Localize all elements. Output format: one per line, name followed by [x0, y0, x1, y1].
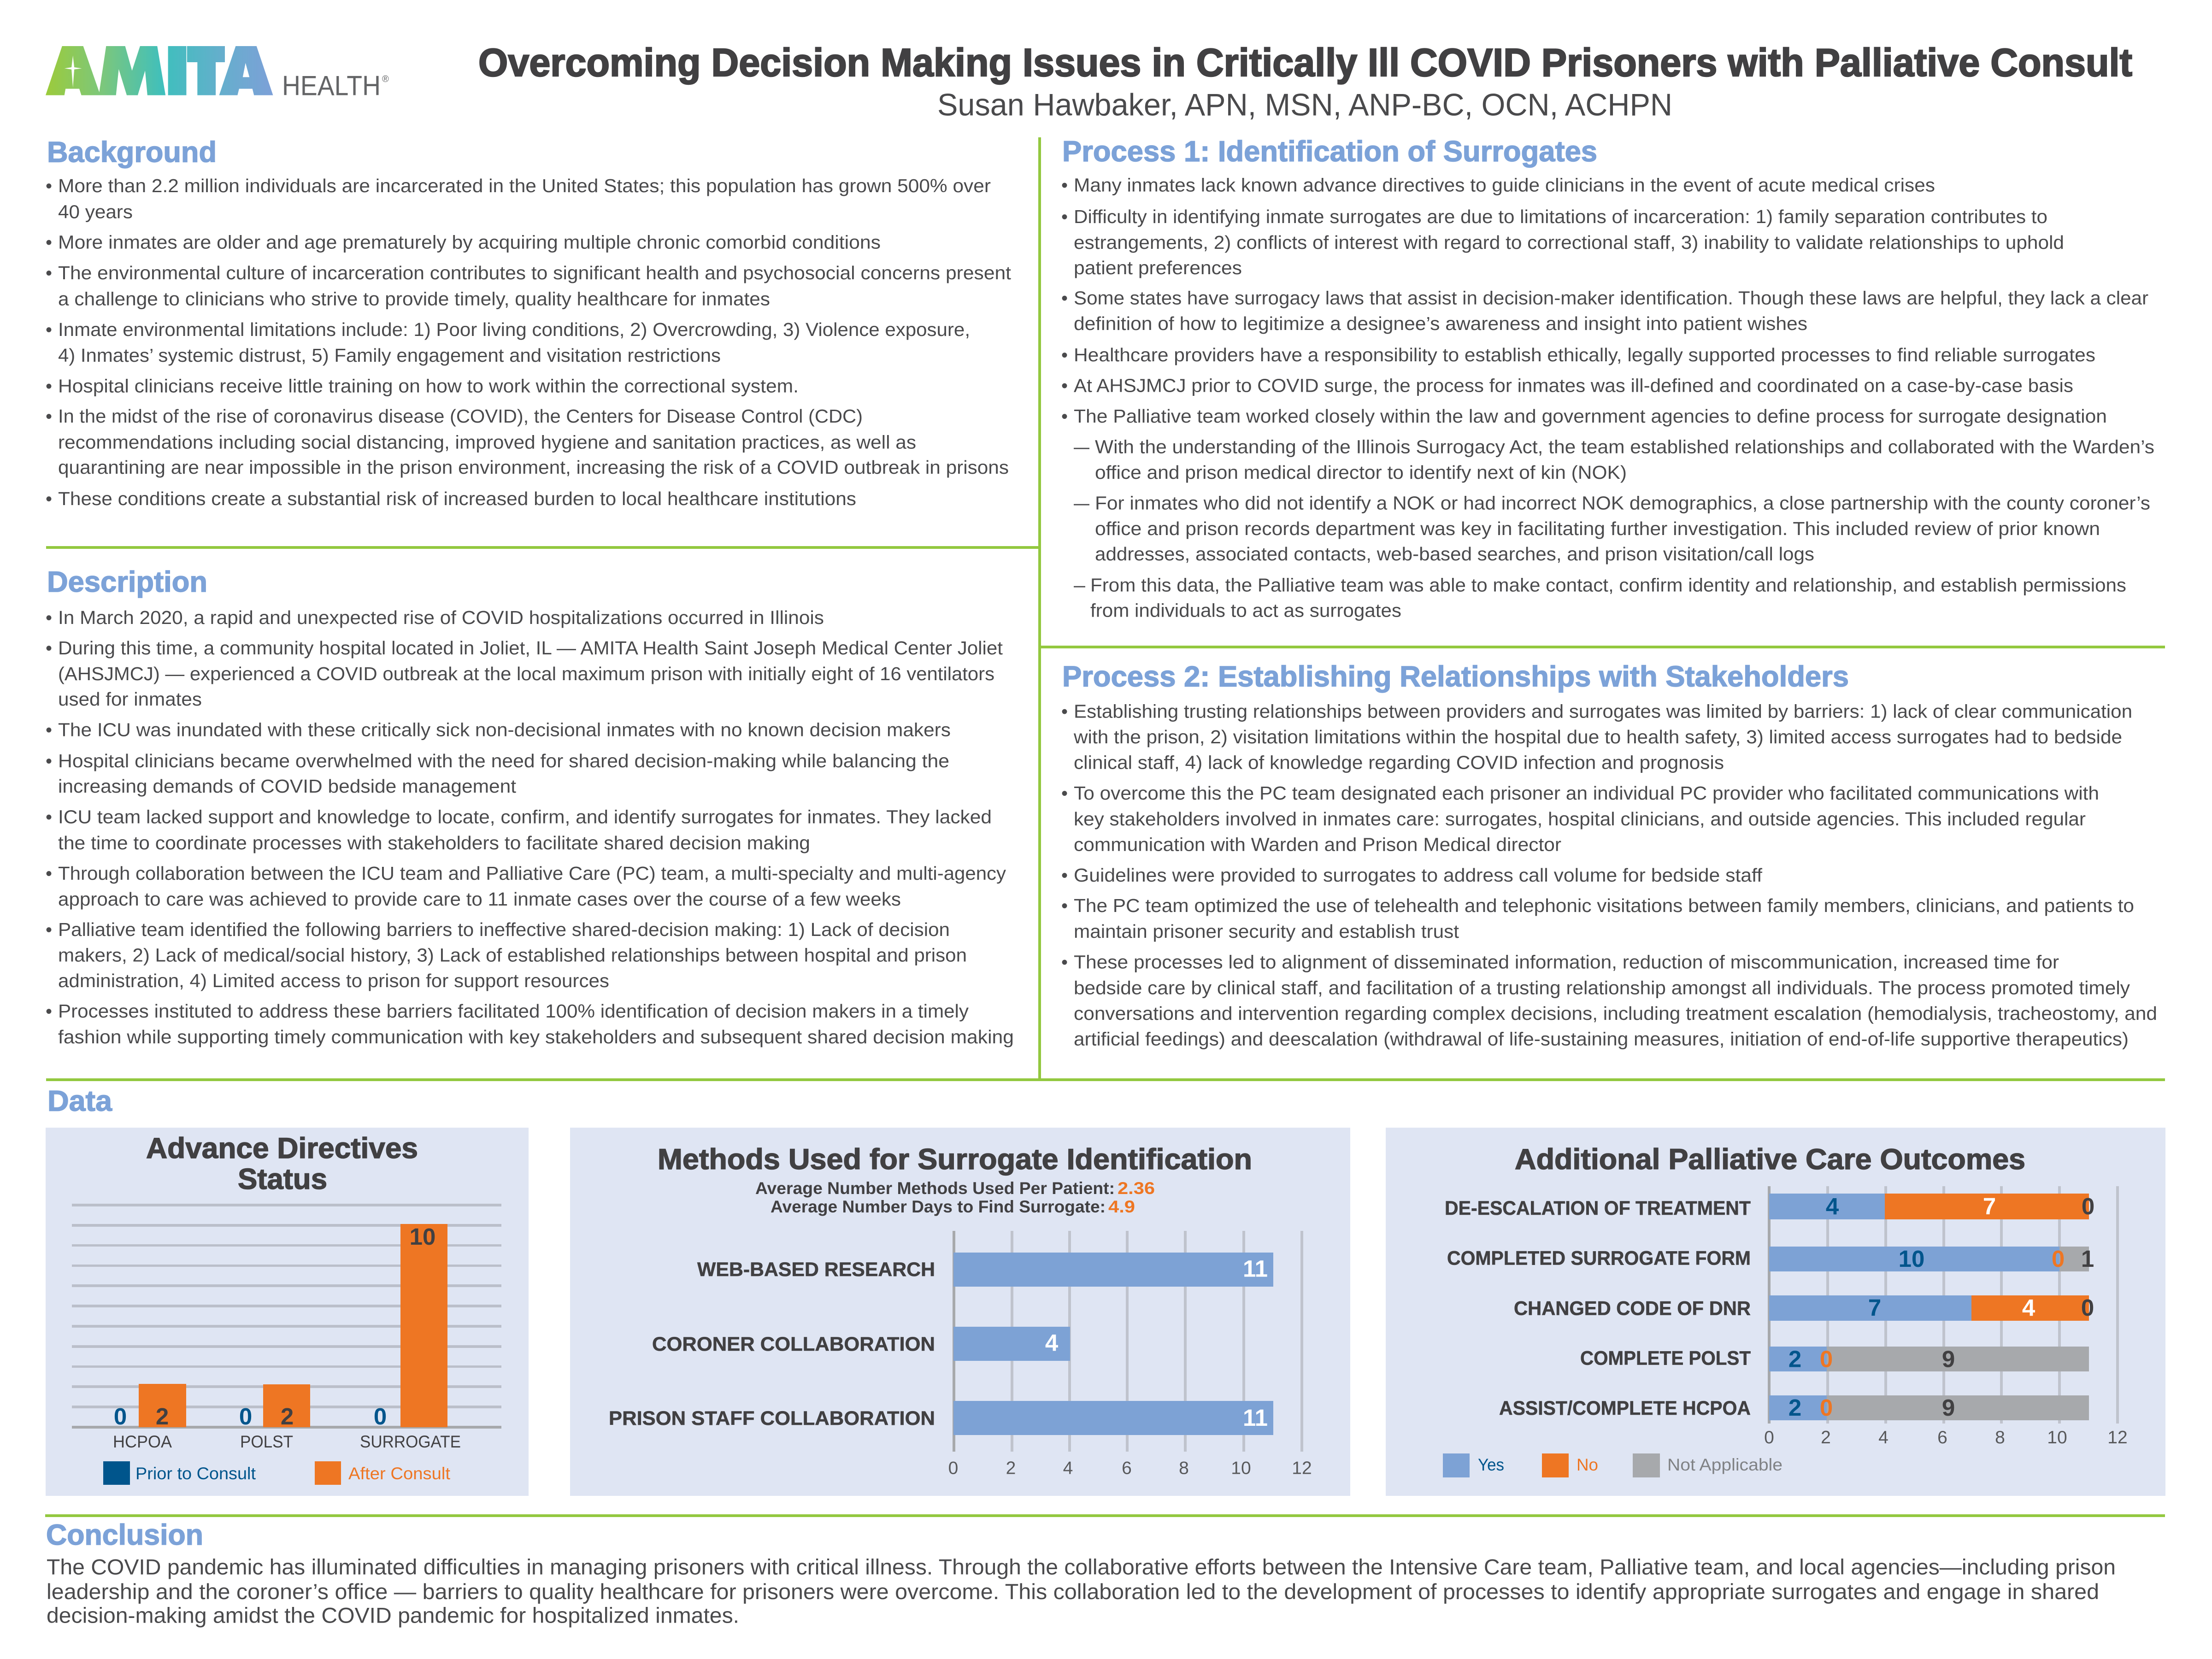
axis ticks: 10: [2047, 1428, 2067, 1447]
legend: Prior to Consult: [135, 1464, 256, 1483]
axis ticks: 2: [1006, 1458, 1016, 1478]
axis ticks: 12: [2107, 1428, 2128, 1447]
text block: Background bullets: •: [46, 176, 52, 196]
text block: Description bullets: Hospital clinicians became overwhelmed with the need for shared decision-making while balancing the: [58, 750, 949, 771]
text block: Background bullets: 4) Inmates’ systemic distrust, 5) Family engagement and visitation restrictions: [58, 345, 721, 366]
bar labels: ASSIST/COMPLETE HCPOA: [1499, 1397, 1751, 1419]
logo: AMITA Health: [46, 46, 389, 101]
legend: Not Applicable: [1667, 1455, 1783, 1474]
text block: Process 2 bullets: The PC team optimized the use of telehealth and telephonic visitations between family members, clinicians, and patients to: [1074, 895, 2134, 916]
author subtitle: Susan Hawbaker, APN, MSN, ANP-BC, OCN, ACHPN: [937, 88, 1672, 123]
text block: Process 1 bullets: Difficulty in identifying inmate surrogates are due to limitations of incarceration: 1) family separation contributes to: [1074, 206, 2047, 227]
bar values: [1045, 1255, 1268, 1431]
axis ticks: 8: [1995, 1428, 2005, 1447]
text block: Process 2 bullets: clinical staff, 4) lack of knowledge regarding COVID infection and prognosis: [1074, 752, 1724, 773]
heading: Data: Data: [47, 1085, 112, 1117]
bar labels: COMPLETE POLST: [1580, 1347, 1751, 1370]
text block: Process 1 bullets: from individuals to act as surrogates: [1090, 600, 1401, 621]
text block: Process 1 bullets: •: [1061, 345, 1068, 365]
bar values: 0: [2082, 1193, 2094, 1219]
bar values: 11: [1243, 1405, 1268, 1431]
bar values: 4: [1045, 1330, 1059, 1356]
data labels: 0: [239, 1403, 252, 1430]
text block: Process 1 bullets: Some states have surrogacy laws that assist in decision-maker identification. Though these laws are helpful, they lack a clear: [1074, 288, 2148, 309]
heading: Process 1: Process 1: Identification of Surrogates: [1062, 135, 1597, 168]
legend: After Consult: [348, 1464, 451, 1483]
category labels: POLST: [240, 1432, 293, 1451]
text block: Process 2 bullets: •: [1061, 952, 1068, 972]
text block: Description bullets: •: [46, 864, 52, 884]
text block: Process 1 bullets: •: [1061, 406, 1068, 427]
text block: Process 1 bullets: •: [1061, 207, 1068, 227]
bar values: 7: [1983, 1193, 1996, 1219]
heading: Description: Description: [47, 566, 207, 598]
grid lines: [953, 1231, 1303, 1452]
text block: Conclusion paragraph: leadership and the coroner’s office — barriers to quality healthcare for prisoners were overcome. This collaboration led to the development of processes to identify appropriate surrogates and engage in shared: [47, 1579, 2099, 1604]
text block: Background bullets: quarantining are near impossible in the prison environment, increasing the risk of a COVID outbreak in prisons: [58, 457, 1009, 478]
text block: Description bullets: •: [46, 1001, 52, 1022]
grid lines: [1768, 1186, 2119, 1424]
bars: [953, 1253, 1273, 1435]
text block: Process 1 bullets: •: [1061, 175, 1068, 195]
text block: Process 1 bullets: –: [1074, 574, 1085, 595]
bar labels: CORONER COLLABORATION: [652, 1333, 935, 1355]
text block: Background bullets: Hospital clinicians receive little training on how to work within the correctional system.: [58, 375, 799, 396]
panel: Additional Palliative Care Outcomes chart: [1386, 1128, 2165, 1496]
text block: Process 2 bullets: Establishing trusting relationships between providers and surrogates was limited by barriers: 1) lack of clear communication: [1074, 700, 2132, 722]
panel: Methods Used for Surrogate Identification chart: [570, 1128, 1350, 1496]
text block: Background bullets: More than 2.2 million individuals are incarcerated in the United States; this population has grown 500% over: [58, 175, 991, 196]
text block: Process 2 bullets: bedside care by clinical staff, and facilitation of a trusting relationship amongst all individuals. The process promoted timely: [1074, 977, 2130, 998]
bar values: 10: [1899, 1246, 1924, 1272]
text block: Process 2 bullets: •: [1061, 783, 1068, 804]
bar labels: [609, 1259, 935, 1430]
text block: Description bullets: •: [46, 720, 52, 740]
axis ticks: 6: [1122, 1458, 1132, 1478]
axis ticks: 12: [1292, 1458, 1312, 1478]
axis ticks: 8: [1179, 1458, 1189, 1478]
chart title: [146, 1132, 418, 1195]
bar labels: COMPLETED SURROGATE FORM: [1447, 1247, 1751, 1269]
text block: Description bullets: •: [46, 751, 52, 771]
text block: Description bullets: Through collaboration between the ICU team and Palliative Care (PC) team, a multi-specialty and multi-agency: [58, 863, 1006, 884]
text block: Background bullets: In the midst of the rise of coronavirus disease (COVID), the Centers for Disease Control (CDC): [58, 406, 863, 427]
text block: Background bullets: •: [46, 232, 52, 253]
legend: No: [1577, 1455, 1598, 1474]
bar labels: CHANGED CODE OF DNR: [1514, 1298, 1751, 1320]
text block: Background bullets: More inmates are older and age prematurely by acquiring multiple chronic comorbid conditions: [58, 231, 881, 253]
text block: Conclusion paragraph: [47, 1555, 2116, 1628]
bar labels: WEB-BASED RESEARCH: [697, 1259, 935, 1281]
bar values: 0: [2081, 1294, 2094, 1321]
bar values: 7: [1868, 1294, 1881, 1321]
text block: Process 2 bullets: communication with Warden and Prison Medical director: [1074, 834, 1561, 855]
bar values: 4: [2022, 1294, 2036, 1321]
text block: Process 2 bullets: •: [1061, 701, 1068, 722]
bar values: [1788, 1193, 2094, 1421]
text block: Process 2 bullets: These processes led to alignment of disseminated information, reduction of miscommunication, increased time for: [1074, 951, 2059, 972]
heading: Background: Background: [47, 136, 217, 169]
summary statistics: [755, 1179, 1155, 1216]
data labels: 0: [374, 1403, 387, 1430]
axis ticks: 0: [948, 1458, 958, 1478]
text block: Background bullets: These conditions create a substantial risk of increased burden to local healthcare institutions: [58, 488, 856, 509]
text block: Process 1 bullets: With the understanding of the Illinois Surrogacy Act, the team established relationships and collaborated with the Warden’s: [1095, 436, 2154, 457]
legend: Yes: [1478, 1455, 1504, 1474]
text block: Background bullets: recommendations including social distancing, improved hygiene and sanitation practices, as well as: [58, 431, 916, 453]
text block: Description bullets: administration, 4) Limited access to prison for support resources: [58, 970, 609, 991]
bar values: 0: [1820, 1394, 1833, 1421]
panel: Description: [46, 566, 1014, 1047]
text block: Description bullets: •: [46, 638, 52, 659]
axis ticks: 4: [1878, 1428, 1888, 1447]
text block: Process 1 bullets: •: [1061, 376, 1068, 396]
bar labels: DE-ESCALATION OF TREATMENT: [1445, 1197, 1751, 1219]
text block: Conclusion paragraph: The COVID pandemic has illuminated difficulties in managing prisoners with critical illness. Through the collaborative efforts between the Intensive Care team, Palliative team, and local agencies—including prison: [47, 1555, 2116, 1579]
text block: Description bullets: During this time, a community hospital located in Joliet, IL — AMITA Health Saint Joseph Medical Center Joliet: [58, 637, 1003, 659]
text block: Process 2 bullets: [1061, 700, 2157, 1050]
title: Overcoming Decision Making Issues in Critically Ill COVID Prisoners with Palliative Consult: [478, 41, 2132, 85]
text block: Process 1 bullets: definition of how to legitimize a designee’s awareness and insight into patient wishes: [1074, 313, 1807, 334]
logo wordmark: HEALTH: HEALTH: [282, 70, 381, 101]
text block: Description bullets: used for inmates: [58, 688, 202, 710]
panel: Process 1: [1061, 135, 2154, 621]
text block: Background bullets: Inmate environmental limitations include: 1) Poor living conditions, 2) Overcrowding, 3) Violence exposure,: [58, 319, 970, 340]
text block: Background bullets: a challenge to clinicians who strive to provide timely, quality healthcare for inmates: [58, 288, 770, 310]
text block: Process 2 bullets: artificial feedings) and deescalation (withdrawal of life-sustaining measures, initiation of end-of-life supportive therapeutics): [1074, 1029, 2129, 1050]
logo mark: AMITA gradient letters: [46, 46, 273, 95]
text block: Process 2 bullets: To overcome this the PC team designated each prisoner an individual PC provider who facilitated communications with: [1074, 782, 2099, 804]
text block: Description bullets: •: [46, 920, 52, 940]
text block: Process 2 bullets: •: [1061, 896, 1068, 916]
bar values: 11: [1243, 1255, 1268, 1282]
text block: Process 2 bullets: with the prison, 2) visitation limitations within the hospital due to health safety, 3) limited access surrogates had to bedside: [1073, 726, 2122, 747]
text block: Description bullets: Processes instituted to address these barriers facilitated 100% identification of decision makers in a timely: [58, 1000, 969, 1022]
text block: Description bullets: •: [46, 807, 52, 828]
axis ticks: [948, 1458, 1312, 1478]
heading: Conclusion: Conclusion: [46, 1519, 203, 1551]
data labels: 10: [410, 1224, 435, 1250]
text block: Process 1 bullets: addresses, associated contacts, web-based searches, and prison visitation/call logs: [1095, 543, 1814, 565]
bar values: 1: [2081, 1246, 2094, 1272]
axis ticks: 6: [1937, 1428, 1947, 1447]
bar values: 4: [1826, 1193, 1839, 1219]
bar labels: [1445, 1197, 1751, 1419]
text block: Background bullets: [46, 175, 1012, 509]
text block: Description bullets: In March 2020, a rapid and unexpected rise of COVID hospitalizations occurred in Illinois: [58, 607, 824, 628]
text block: Description bullets: the time to coordinate processes with stakeholders to facilitate shared decision making: [58, 832, 810, 853]
text block: Description bullets: makers, 2) Lack of medical/social history, 3) Lack of established relationships between hospital and prison: [58, 945, 967, 966]
divider: column and section rules: [45, 137, 2165, 1517]
summary statistics: Average Number Methods Used Per Patient:: [755, 1179, 1115, 1198]
text block: Description bullets: fashion while supporting timely communication with key stakeholders and subsequent shared decision making: [58, 1026, 1014, 1047]
legend: [1443, 1453, 1783, 1477]
text block: Process 1 bullets: —: [1074, 436, 1089, 457]
text block: Process 1 bullets: Healthcare providers have a responsibility to establish ethically, legally supported processes to find reliable surrogates: [1074, 344, 2095, 365]
data labels: [114, 1224, 435, 1430]
text block: Description bullets: increasing demands of COVID bedside management: [58, 776, 517, 797]
axis ticks: 10: [1231, 1458, 1251, 1478]
text block: Description bullets: [46, 607, 1014, 1047]
text block: Process 2 bullets: key stakeholders involved in inmates care: surrogates, hospital clinicians, and outside agencies. This included regular: [1074, 808, 2086, 830]
category labels: HCPOA: [113, 1432, 172, 1451]
axis ticks: [1764, 1428, 2128, 1447]
text block: Process 1 bullets: At AHSJMCJ prior to COVID surge, the process for inmates was ill-defined and coordinated on a case-by-case basis: [1074, 375, 2073, 396]
panel: Advance Directives Status chart: [46, 1128, 529, 1496]
text block: Process 1 bullets: [1061, 174, 2154, 621]
text block: Background bullets: •: [46, 489, 52, 509]
panel: Background: [46, 136, 1012, 509]
text block: Description bullets: approach to care was achieved to provide care to 11 inmate cases over the course of a few weeks: [58, 888, 901, 910]
bar values: 9: [1942, 1394, 1955, 1421]
axis ticks: 2: [1821, 1428, 1831, 1447]
text block: Background bullets: •: [46, 376, 52, 396]
text block: Background bullets: 40 years: [58, 201, 133, 222]
bar labels: PRISON STAFF COLLABORATION: [609, 1407, 935, 1430]
text block: Process 2 bullets: Guidelines were provided to surrogates to address call volume for bedside staff: [1074, 865, 1763, 886]
logo registered mark: ®: [382, 74, 389, 84]
bar values: 0: [2052, 1246, 2065, 1272]
legend: [103, 1461, 451, 1485]
category labels: SURROGATE: [360, 1432, 461, 1451]
text block: Background bullets: •: [46, 263, 52, 283]
text block: Description bullets: •: [46, 608, 52, 628]
text block: Process 1 bullets: —: [1074, 492, 1089, 513]
chart title: Status: [238, 1163, 327, 1195]
summary statistics: 4.9: [1108, 1197, 1135, 1216]
chart title: Methods Used for Surrogate Identification: [658, 1143, 1252, 1176]
data labels: 2: [281, 1403, 294, 1430]
text block: Process 1 bullets: patient preferences: [1074, 257, 1242, 278]
grid lines: [72, 1204, 501, 1429]
text block: Process 1 bullets: For inmates who did not identify a NOK or had incorrect NOK demographics, a close partnership with the county coroner’s: [1095, 492, 2150, 513]
axis ticks: 0: [1764, 1428, 1774, 1447]
axis ticks: 4: [1063, 1458, 1073, 1478]
text block: Process 1 bullets: estrangements, 2) conflicts of interest with regard to correctional staff, 3) inability to validate relationships to uphold: [1074, 232, 2064, 253]
category labels: [113, 1432, 461, 1451]
bars: After Consult: [139, 1224, 447, 1427]
text block: Background bullets: •: [46, 406, 52, 427]
text block: Process 2 bullets: •: [1061, 865, 1068, 886]
bar values: 9: [1942, 1346, 1955, 1372]
text block: Background bullets: •: [46, 320, 52, 340]
text block: Process 1 bullets: Many inmates lack known advance directives to guide clinicians in the event of acute medical crises: [1074, 174, 1935, 195]
text block: Conclusion paragraph: decision-making amidst the COVID pandemic for hospitalized inmates.: [47, 1603, 739, 1628]
bar values: 2: [1788, 1346, 1801, 1372]
bar values: 2: [1788, 1394, 1801, 1421]
text block: Description bullets: ICU team lacked support and knowledge to locate, confirm, and identify surrogates for inmates. They lacked: [58, 806, 992, 828]
data labels: 2: [156, 1403, 169, 1430]
text block: Process 1 bullets: The Palliative team worked closely within the law and government agencies to define process for surrogate designation: [1074, 406, 2107, 427]
panel: Process 2: [1061, 661, 2157, 1050]
text block: Description bullets: The ICU was inundated with these critically sick non-decisional inmates with no known decision makers: [58, 719, 951, 740]
text block: Description bullets: (AHSJMCJ) — experienced a COVID outbreak at the local maximum prison with initially eight of 16 ventilators: [58, 663, 994, 684]
bar values: 0: [1820, 1346, 1833, 1372]
panel: Conclusion: [46, 1519, 2116, 1628]
summary statistics: Average Number Days to Find Surrogate:: [771, 1197, 1106, 1216]
text block: Description bullets: Palliative team identified the following barriers to ineffective shared-decision making: 1) Lack of decision: [58, 919, 950, 940]
text block: Process 1 bullets: office and prison records department was key in facilitating further investigation. This included review of prior known: [1095, 518, 2100, 539]
data labels: 0: [114, 1403, 127, 1430]
summary statistics: 2.36: [1118, 1179, 1155, 1198]
text block: Process 2 bullets: conversations and intervention regarding complex decisions, including treatment escalation (hemodialysis, tracheostomy, and: [1074, 1003, 2157, 1024]
stacked bars: [1769, 1194, 2089, 1420]
text block: Process 1 bullets: From this data, the Palliative team was able to make contact, confirm identity and relationship, and establish permissions: [1090, 574, 2126, 595]
heading: Process 2: Process 2: Establishing Relationships with Stakeholders: [1062, 661, 1849, 693]
text block: Background bullets: The environmental culture of incarceration contributes to significant health and psychosocial concerns present: [58, 262, 1012, 283]
text block: Process 1 bullets: office and prison medical director to identify next of kin (NOK): [1095, 462, 1627, 483]
chart title: Additional Palliative Care Outcomes: [1515, 1143, 2025, 1176]
text block: Process 2 bullets: maintain prisoner security and establish trust: [1074, 921, 1459, 942]
chart title: Advance Directives: [146, 1132, 418, 1165]
text block: Process 1 bullets: •: [1061, 288, 1068, 309]
